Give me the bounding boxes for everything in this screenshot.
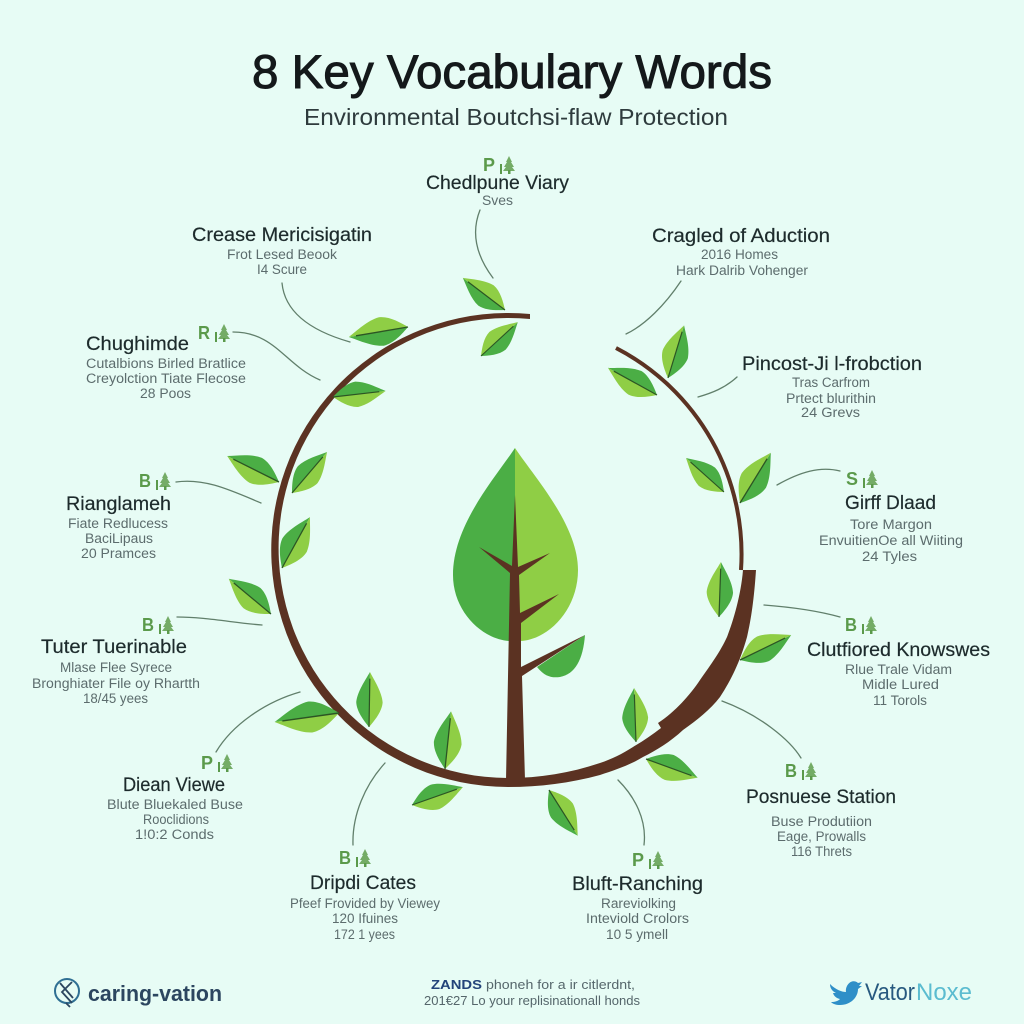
term: Tuter Tuerinable: 18/45 yees (83, 691, 148, 706)
connector lines (176, 210, 840, 845)
footer logo: caring-vation: caring-vation (88, 981, 222, 1006)
icon (483, 155, 515, 175)
subtitle: Environmental Boutchsi-flaw Protection (304, 104, 728, 130)
term: Clutfiored Knowswes: Midle Lured (862, 677, 939, 692)
icon (339, 848, 371, 868)
term: Diean Viewe: Blute Bluekaled Buse (107, 797, 243, 812)
footer brand: bird icon and Vator Noxe (830, 979, 972, 1006)
icon (845, 615, 877, 635)
icon: B (845, 615, 857, 635)
term: Bluft-Ranching: Bluft-Ranching (572, 874, 703, 895)
term: Chedlpune Viary (426, 155, 570, 208)
icon (198, 323, 230, 343)
central tree (453, 448, 585, 780)
term: Chughimde: 28 Poos (140, 386, 191, 401)
term: Dripdi Cates: 172 1 yees (334, 927, 395, 942)
icon (142, 615, 174, 635)
term: Tuter Tuerinable (32, 615, 200, 706)
term: Chedlpune Viary: Sves (482, 193, 513, 208)
footer brand: bird icon and Vator Noxe: Noxe (916, 979, 972, 1006)
term: Bluft-Ranching: Inteviold Crolors (586, 911, 689, 926)
term: Crease Mericisigatin: Frot Lesed Beook (227, 247, 337, 262)
term: Cragled of Aduction: Hark Dalrib Vohenger (676, 263, 809, 278)
term: Dripdi Cates: Dripdi Cates (310, 873, 416, 894)
term: Cragled of Aduction (652, 226, 830, 278)
term: Crease Mericisigatin: Crease Mericisigatin (192, 225, 372, 246)
term: Clutfiored Knowswes: 11 Torols (873, 693, 927, 708)
term: Bluft-Ranching: 10 5 ymell (606, 927, 668, 942)
term: Tuter Tuerinable: Mlase Flee Syrece (60, 660, 172, 675)
term: Dripdi Cates: 120 Ifuines (332, 911, 398, 926)
term: Girff Dlaad: Tore Margon (850, 517, 932, 532)
circular branch (271, 313, 756, 787)
term: Clutfiored Knowswes: Clutfiored Knowswes (807, 640, 990, 661)
term: Posnuese Station: Eage, Prowalls (777, 829, 866, 844)
footer note: 201€27 Lo your replisinationall honds (424, 993, 640, 1008)
term: Rianglameh: Fiate Redlucess (68, 516, 168, 531)
term: Rianglameh: Rianglameh (66, 494, 171, 515)
footer note: ZANDS (431, 977, 482, 992)
term: Pincost-Ji l-frobction: Pincost-Ji l-frobction (742, 354, 922, 375)
term: Cragled of Aduction: Cragled of Aduction (652, 226, 830, 247)
icon: B (142, 615, 154, 635)
title: 8 Key Vocabulary Words (252, 45, 772, 98)
term: Chughimde: Creyolction Tiate Flecose (86, 371, 246, 386)
term: Rianglameh (66, 471, 171, 561)
term: Rianglameh: 20 Pramces (81, 546, 156, 561)
term: Cragled of Aduction: 2016 Homes (701, 247, 778, 262)
term: Dripdi Cates (290, 848, 440, 942)
icon (846, 469, 878, 489)
term: Girff Dlaad: Girff Dlaad (845, 493, 936, 514)
icon: P (632, 850, 644, 870)
term: Posnuese Station (746, 761, 896, 859)
icon (785, 761, 817, 781)
term: Diean Viewe (107, 753, 243, 842)
term: Diean Viewe: Diean Viewe (123, 775, 225, 796)
term: Chughimde (86, 323, 246, 401)
footer note (424, 977, 640, 1008)
term: Diean Viewe: Rooclidions (143, 812, 209, 827)
term: Posnuese Station: Buse Produtiion (771, 814, 872, 829)
term: Pincost-Ji l-frobction (742, 354, 922, 420)
term: Girff Dlaad: EnvuitienOe all Wiiting (819, 533, 963, 548)
icon: B (139, 471, 151, 491)
icon: B (785, 761, 797, 781)
term: Rianglameh: BaciLipaus (85, 531, 153, 546)
term: Pincost-Ji l-frobction: Prtect blurithin (786, 391, 876, 406)
term: Bluft-Ranching (572, 850, 703, 942)
term: Chedlpune Viary: Chedlpune Viary (426, 173, 570, 194)
icon: B (339, 848, 351, 868)
term: Clutfiored Knowswes: Rlue Trale Vidam (845, 662, 952, 677)
term: Pincost-Ji l-frobction: 24 Grevs (801, 405, 860, 420)
icon: P (483, 155, 495, 175)
icon: S (846, 469, 858, 489)
term: Chughimde: Chughimde (86, 334, 189, 355)
footer brand: bird icon and Vator Noxe: Vator (865, 979, 915, 1006)
term: Crease Mericisigatin (192, 225, 372, 277)
icon: P (201, 753, 213, 773)
leaves on the branch (220, 268, 797, 843)
term: Chughimde: Cutalbions Birled Bratlice (86, 356, 246, 371)
term: Crease Mericisigatin: I4 Scure (257, 262, 307, 277)
term: Pincost-Ji l-frobction: Tras Carfrom (792, 375, 870, 390)
term: Posnuese Station: Posnuese Station (746, 787, 896, 808)
term: Posnuese Station: 116 Threts (791, 844, 852, 859)
term: Bluft-Ranching: Rareviolking (601, 896, 676, 911)
term: Tuter Tuerinable: Tuter Tuerinable (41, 637, 187, 658)
term: Diean Viewe: 1!0:2 Conds (135, 827, 214, 842)
term: Clutfiored Knowswes (807, 615, 990, 708)
term: Girff Dlaad (819, 469, 963, 564)
footer note: phoneh for a ir citlerdnt, (486, 977, 635, 992)
term: Girff Dlaad: 24 Tyles (862, 549, 917, 564)
icon: R (198, 323, 210, 343)
term: Dripdi Cates: Pfeef Frovided by Viewey (290, 896, 440, 911)
term: Tuter Tuerinable: Bronghiater File oy Rhartth (32, 676, 200, 691)
